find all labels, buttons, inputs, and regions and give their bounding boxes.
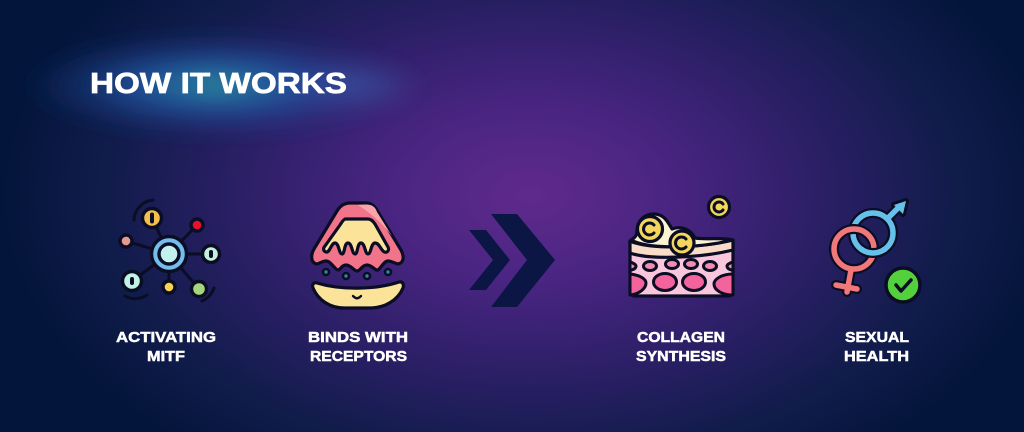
icon: molecular network <box>120 200 220 301</box>
icon: gender symbols with check <box>834 201 920 302</box>
step 2: binds with receptors <box>308 203 408 365</box>
step 4: sexual health <box>834 201 920 365</box>
label: sexual health <box>844 330 909 365</box>
label: activating MITF: MITF <box>147 349 185 365</box>
title: HOW IT WORKS <box>90 68 347 100</box>
label: activating MITF <box>116 330 216 365</box>
label: collagen synthesis: SYNTHESIS <box>636 349 726 365</box>
label: collagen synthesis: COLLAGEN <box>637 330 725 346</box>
label: sexual health: HEALTH <box>844 349 909 365</box>
icon: skin layers with collagen <box>630 196 733 296</box>
icon: synapse <box>312 203 403 308</box>
label: activating MITF: ACTIVATING <box>116 330 216 346</box>
label: binds with receptors: RECEPTORS <box>310 349 407 365</box>
label: collagen synthesis <box>636 330 726 365</box>
label: sexual health: SEXUAL <box>845 330 909 346</box>
title glow <box>20 33 425 137</box>
label: binds with receptors <box>308 330 408 365</box>
step 3: collagen synthesis <box>630 196 733 365</box>
arrow: double chevron <box>469 214 555 307</box>
step 1: activating MITF <box>116 200 220 365</box>
label: binds with receptors: BINDS WITH <box>308 330 408 346</box>
